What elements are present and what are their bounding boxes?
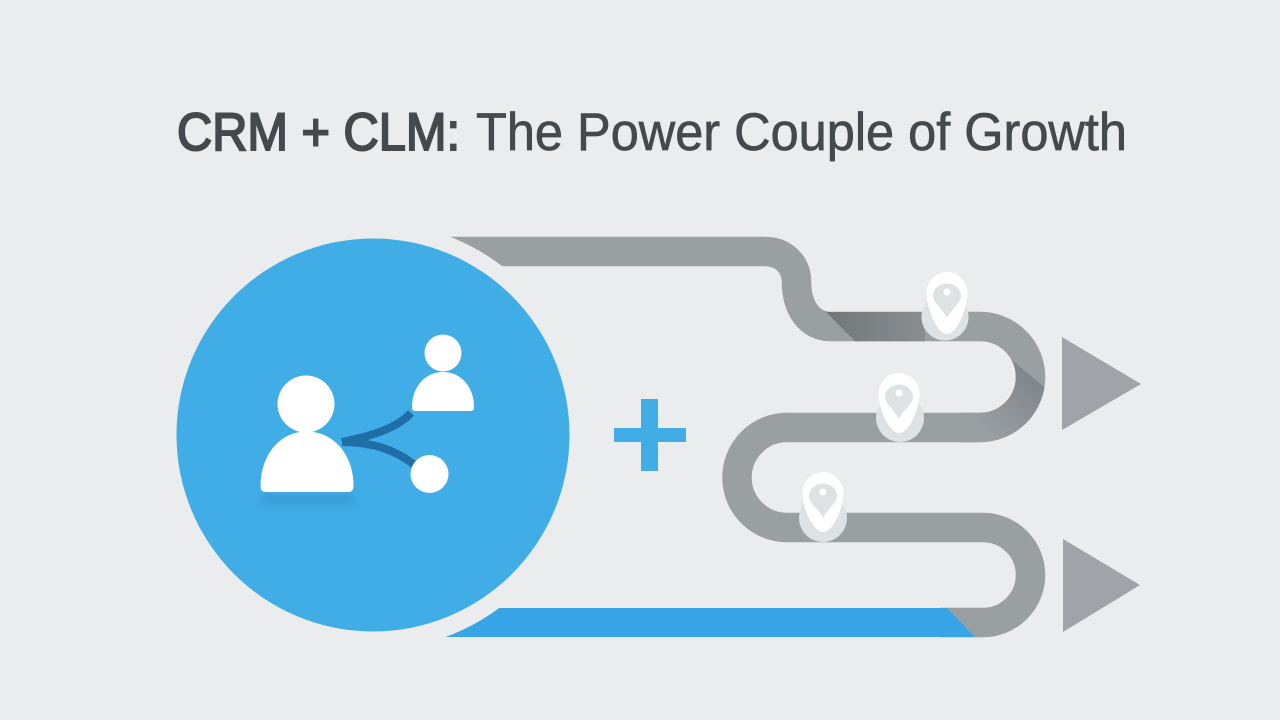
road: shaded bend (955, 326, 1030, 428)
circle halo (158, 222, 586, 650)
blue circle (176, 238, 570, 632)
blue circle with halo (158, 222, 586, 650)
map pin 1 (922, 272, 968, 340)
road: gray path (430, 252, 1031, 622)
map pin 2 (876, 373, 924, 442)
small person (412, 334, 474, 411)
arrow: lower (1063, 539, 1140, 632)
title (177, 103, 1127, 162)
infographic canvas (176, 111, 1141, 638)
person shadow (262, 495, 354, 504)
connector lines (342, 413, 418, 468)
node dot (410, 455, 448, 493)
large person (260, 376, 354, 492)
winding road (420, 252, 1031, 637)
title: regular part: The Power Couple of Growth (476, 103, 1127, 162)
road: dark fold segment (826, 312, 925, 341)
arrow: upper (1062, 337, 1141, 430)
map pin 3 (799, 472, 847, 542)
road: blue segment (420, 608, 975, 637)
title: bold part: CRM + CLM: (177, 103, 460, 162)
icon: connected people (260, 334, 474, 504)
plus sign (614, 399, 686, 471)
